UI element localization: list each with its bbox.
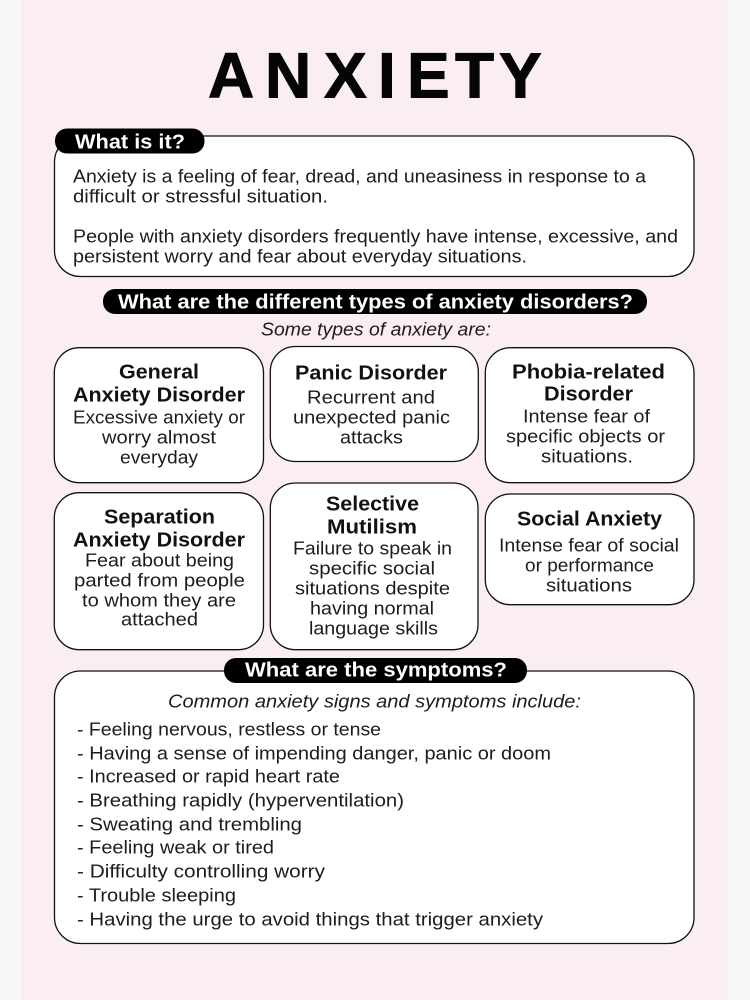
panel: phobia-related disorder: Disorder	[544, 384, 633, 406]
heading: symptoms	[224, 658, 527, 683]
panel: separation anxiety disorder: to whom they are	[82, 590, 236, 611]
panel: selective mutilism	[270, 483, 478, 650]
panel: phobia-related disorder: Intense fear of	[523, 406, 651, 427]
panel: general anxiety disorder: everyday	[120, 447, 199, 468]
symptoms list: - Having the urge to avoid things that trigger anxiety	[77, 909, 544, 930]
symptoms list: - Increased or rapid heart rate	[77, 766, 340, 787]
symptoms list: - Feeling weak or tired	[77, 837, 274, 858]
panel: panic disorder: unexpected panic	[293, 407, 450, 428]
panel: selective mutilism: language skills	[309, 618, 438, 639]
text block: definition: People with anxiety disorders frequently have intense, excessive, and	[73, 226, 678, 247]
panel: social anxiety: or performance	[525, 555, 654, 576]
panel: phobia-related disorder	[485, 348, 694, 483]
heading: types of anxiety disorders: What are the different types of anxiety disorders?	[118, 292, 633, 314]
panel: separation anxiety disorder	[54, 493, 263, 650]
symptoms list: - Breathing rapidly (hyperventilation)	[77, 790, 404, 811]
panel: symptoms	[54, 671, 694, 944]
panel: general anxiety disorder: worry almost	[101, 427, 216, 448]
panel: general anxiety disorder	[54, 348, 263, 483]
panel: panic disorder: Recurrent and	[307, 387, 435, 408]
symptoms list: - Difficulty controlling worry	[77, 861, 326, 882]
panel: separation anxiety disorder: Anxiety Disorder	[73, 530, 245, 552]
panel: separation anxiety disorder: Separation	[104, 507, 215, 529]
panel: panic disorder	[270, 346, 478, 462]
heading: symptoms: What are the symptoms?	[245, 660, 507, 682]
panel: social anxiety: Intense fear of social	[499, 535, 679, 556]
symptoms list	[77, 719, 551, 930]
panel: phobia-related disorder: Phobia-related	[512, 362, 665, 384]
panel: selective mutilism: Failure to speak in	[293, 538, 452, 559]
subheading: symptoms intro: Common anxiety signs and symptoms include:	[168, 692, 581, 712]
subheading: types intro: Some types of anxiety are:	[261, 320, 491, 340]
panel: social anxiety: Social Anxiety	[517, 509, 663, 531]
panel: social anxiety	[485, 494, 694, 605]
panel: social anxiety: situations	[546, 575, 632, 596]
panel: selective mutilism: situations despite	[295, 578, 450, 599]
heading: what is it	[55, 128, 204, 154]
text block: definition: persistent worry and fear about everyday situations.	[73, 246, 527, 267]
symptoms list: - Having a sense of impending danger, panic or doom	[77, 743, 551, 764]
panel: separation anxiety disorder: attached	[121, 609, 198, 630]
symptoms list: - Trouble sleeping	[77, 885, 236, 906]
text block: definition: difficult or stressful situation.	[73, 186, 328, 207]
panel: panic disorder: Panic Disorder	[295, 363, 447, 385]
panel: panic disorder: attacks	[340, 427, 403, 448]
heading: what is it: What is it?	[75, 132, 185, 154]
panel: general anxiety disorder: Anxiety Disorder	[73, 385, 245, 407]
panel: separation anxiety disorder: parted from people	[74, 570, 245, 591]
panel: selective mutilism: Selective	[326, 494, 419, 516]
symptoms list: - Feeling nervous, restless or tense	[77, 719, 381, 740]
panel: selective mutilism: Mutilism	[327, 517, 417, 539]
panel: general anxiety disorder: General	[119, 362, 199, 384]
panel: selective mutilism: specific social	[309, 558, 435, 579]
panel: what is it	[54, 128, 694, 276]
symptoms list: - Sweating and trembling	[77, 814, 302, 835]
text block: definition	[73, 166, 678, 267]
panel: selective mutilism: having normal	[310, 598, 434, 619]
panel: separation anxiety disorder: Fear about being	[85, 550, 234, 571]
panel: phobia-related disorder: situations.	[541, 446, 633, 467]
panel: general anxiety disorder: Excessive anxiety or	[73, 407, 245, 428]
text block: definition: Anxiety is a feeling of fear, dread, and uneasiness in response to a	[73, 166, 647, 187]
title: ANXIETY	[208, 40, 542, 112]
panel: phobia-related disorder: specific objects or	[506, 426, 665, 447]
